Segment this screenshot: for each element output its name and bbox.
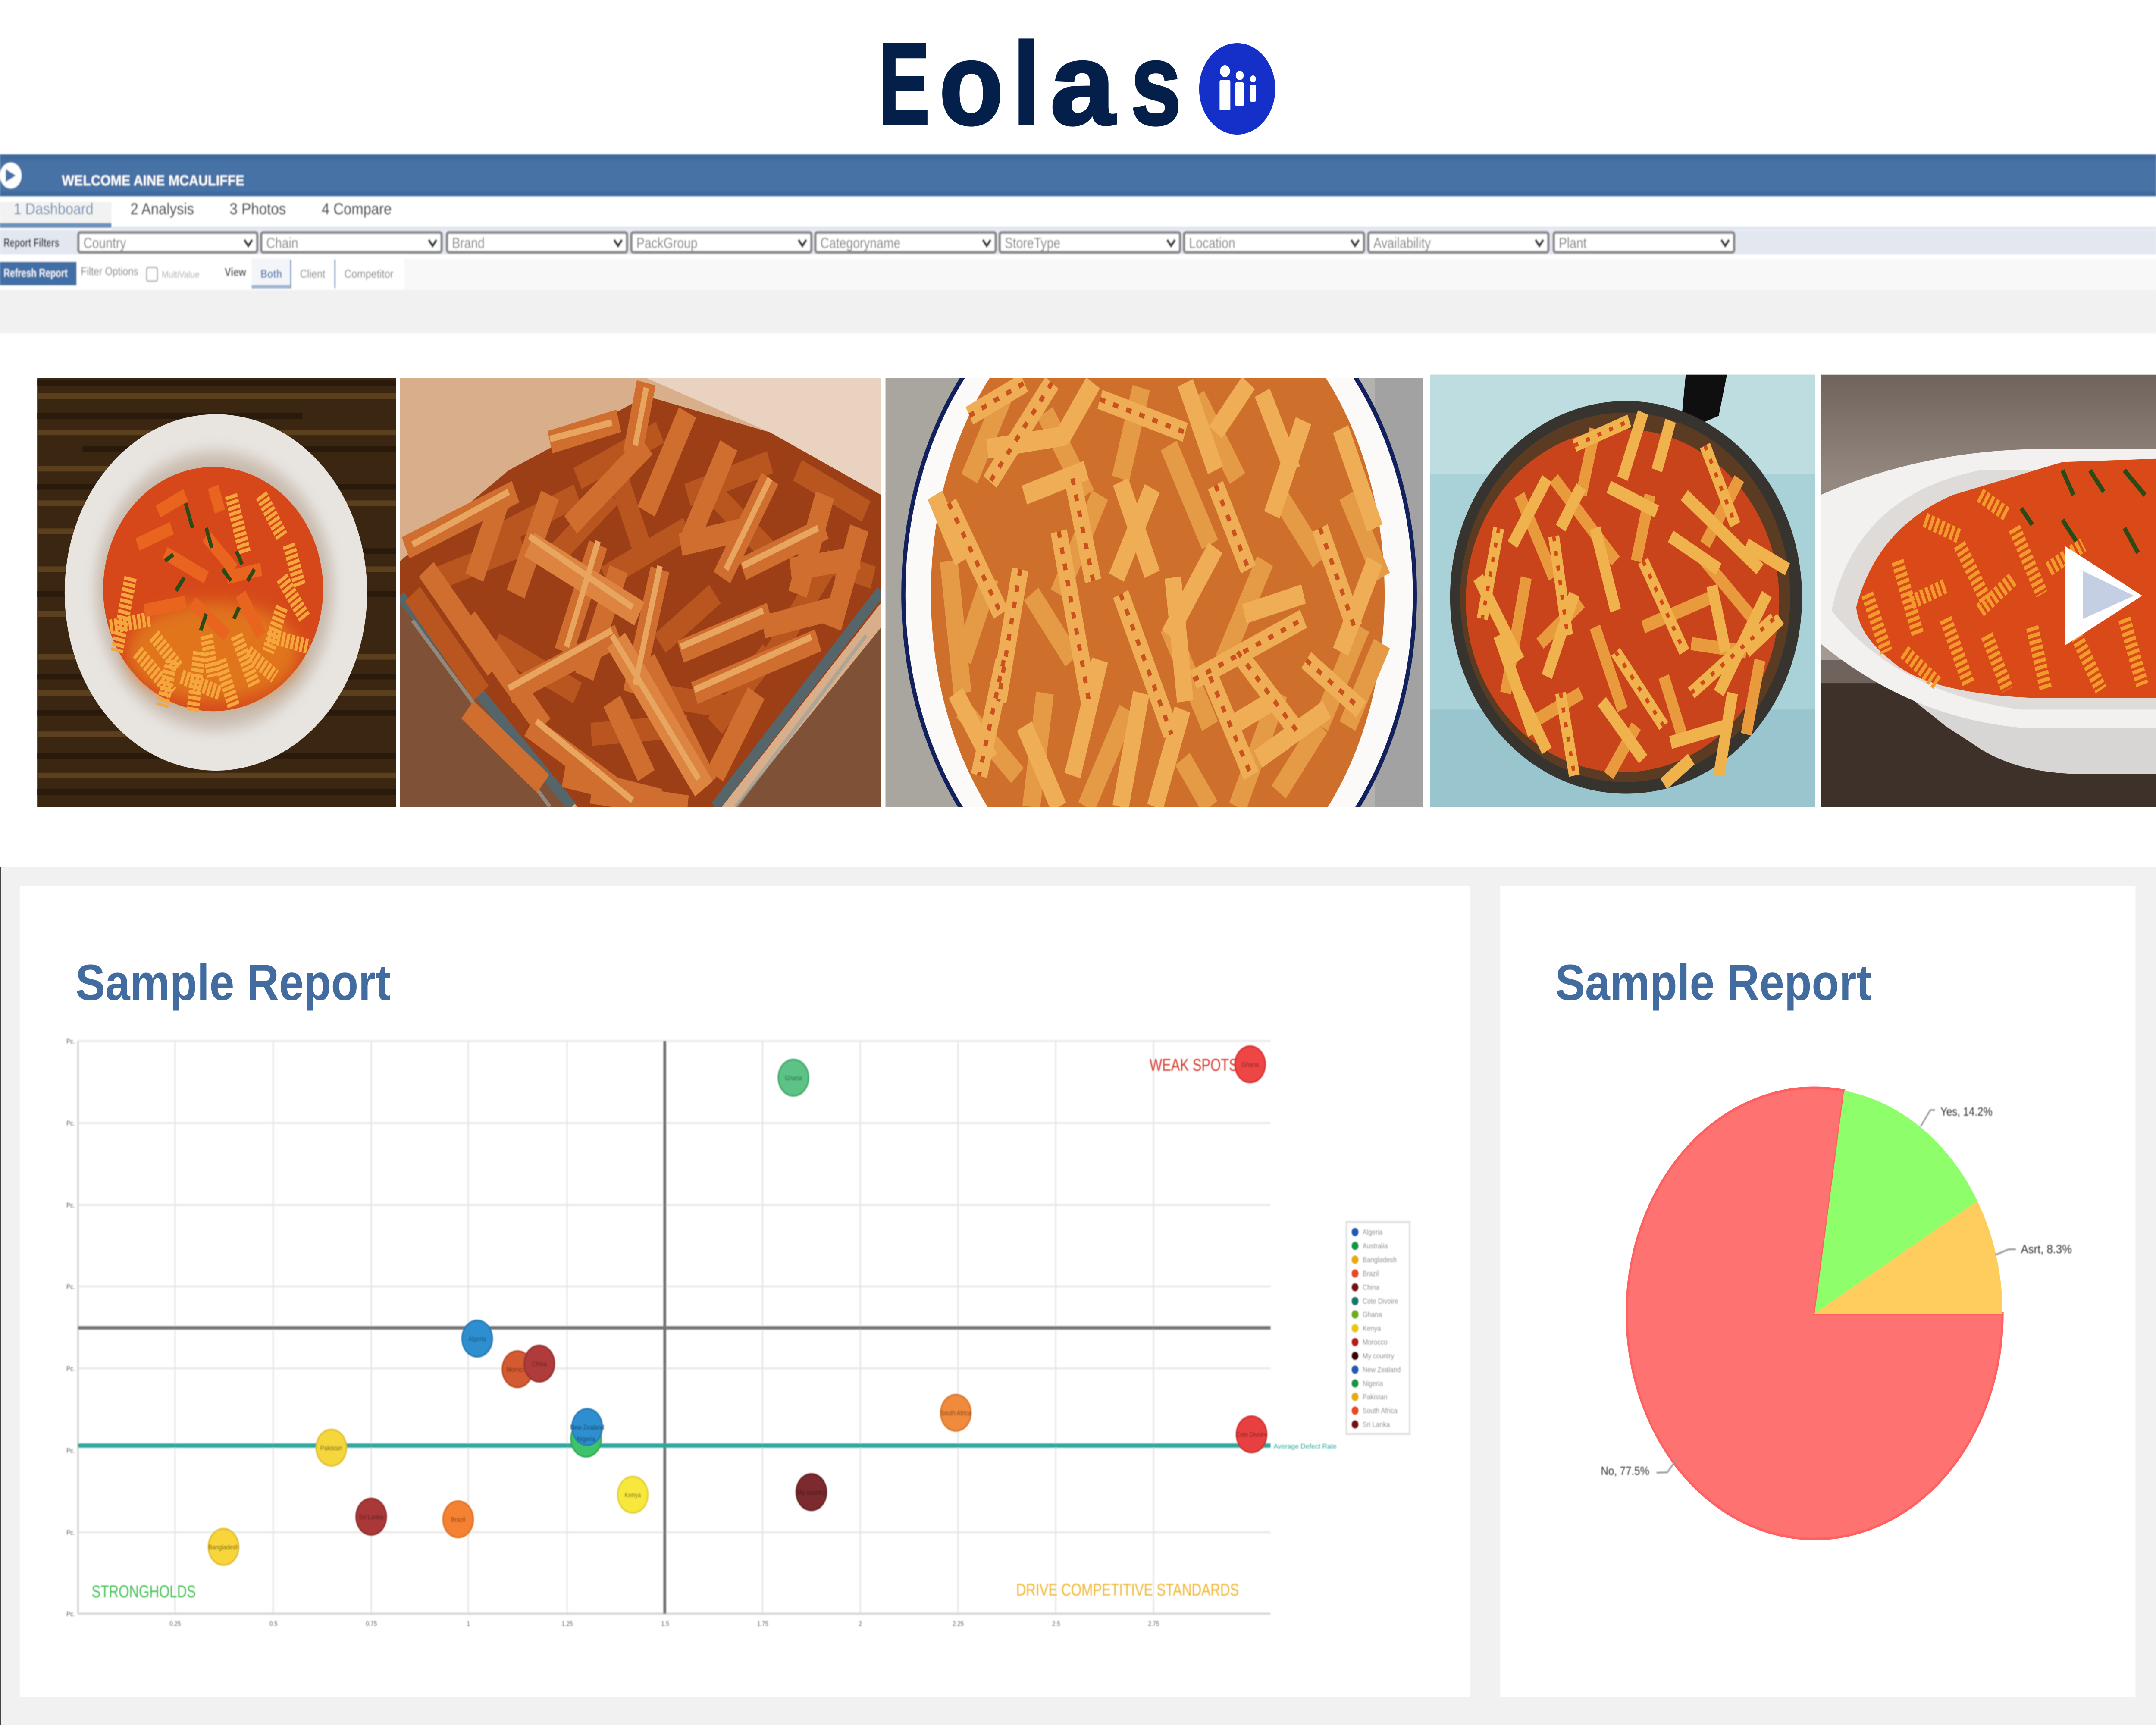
axis labels: 0.5 (270, 1620, 278, 1628)
report filters row: Country (83, 235, 126, 251)
bowl (1904, 693, 2156, 774)
quadrant labels (92, 1055, 1337, 1601)
welcome bar (0, 154, 2156, 196)
refresh and view options row: MultiValue (162, 270, 200, 280)
logo wordmark: s (1131, 19, 1181, 149)
photo 3: penne on a white plate with navy rim (886, 378, 1423, 807)
axis labels: Pc. (66, 1038, 75, 1045)
heading: Sample Report: Sample Report (75, 955, 391, 1011)
data bubbles: China (532, 1361, 547, 1368)
report filters row: Plant (1559, 235, 1587, 251)
axis labels: Pc. (66, 1120, 75, 1127)
report filters row (0, 230, 2156, 254)
quadrant labels: STRONGHOLDS (92, 1582, 196, 1601)
axis labels: Pc. (66, 1447, 75, 1455)
chart legend: Australia (1363, 1242, 1388, 1250)
photo 1: fusilli on a white plate on dark wood (37, 378, 396, 807)
axis labels: 0.75 (366, 1620, 377, 1628)
refresh and view options row: Competitor (344, 268, 393, 281)
report filters row: Brand (452, 235, 485, 251)
refresh and view options row: Filter Options (81, 265, 138, 278)
data bubbles: My country (797, 1489, 826, 1496)
navigation tabs: 3 Photos (229, 200, 286, 218)
refresh and view options row: Refresh Report (3, 267, 68, 280)
photo 2: penne in a glass baking dish (400, 378, 881, 807)
grey dashboard background (0, 867, 2156, 1725)
data bubbles (208, 1046, 1267, 1565)
report filters row: Location (1189, 235, 1235, 251)
chart legend: Kenya (1363, 1324, 1381, 1333)
icon: play button (2065, 546, 2142, 645)
report filters row: Availability (1373, 235, 1431, 251)
axis labels: 1.5 (661, 1620, 669, 1628)
logo wordmark: o (939, 19, 1003, 149)
axis labels: 2.25 (953, 1620, 964, 1628)
report filters row: StoreType (1005, 235, 1060, 251)
chart legend: Bangladesh (1363, 1255, 1397, 1264)
heading: Sample Report: Sample Report (1555, 955, 1871, 1011)
quadrant labels: Average Defect Rate (1273, 1443, 1337, 1450)
axis labels: Pc. (66, 1202, 75, 1209)
slice: Yes 14.2% (1814, 1091, 1977, 1314)
data bubbles: Brazil (451, 1516, 465, 1524)
refresh and view options row (0, 254, 404, 290)
pie chart (1601, 1088, 2072, 1539)
chart legend: Cote Divoire (1363, 1297, 1398, 1305)
axis labels: 2 (859, 1620, 862, 1628)
data bubbles: Ghana (1241, 1061, 1259, 1069)
logo wordmark: l (1013, 19, 1040, 149)
axis labels: 1.25 (562, 1620, 573, 1628)
chart legend: Sri Lanka (1363, 1420, 1390, 1429)
panel: pie sample report (1500, 886, 2135, 1697)
navigation tabs: 1 Dashboard (14, 200, 94, 218)
axis labels: 1.75 (757, 1620, 768, 1628)
slice: Asrt 8.3% (1814, 1201, 2002, 1314)
axis labels: 2.75 (1148, 1620, 1159, 1628)
photo 4: penne in a black skillet on teal background (1430, 375, 1815, 807)
quadrant labels: WEAK SPOTS (1150, 1055, 1238, 1075)
chart legend: Nigeria (1363, 1379, 1383, 1388)
axis labels: 2.5 (1052, 1620, 1060, 1628)
photo 5: fusilli in a white bowl with play button (1821, 375, 2156, 807)
navigation tabs (0, 200, 2156, 229)
report filters row: Categoryname (820, 235, 900, 251)
axis labels: 0.25 (169, 1620, 181, 1628)
pie labels: No, 77.5% (1601, 1465, 1649, 1478)
data bubbles: New Zealand (570, 1424, 604, 1431)
data bubbles: South Africa (940, 1410, 971, 1417)
data bubbles: Nigeria (577, 1436, 595, 1443)
chart legend: Ghana (1363, 1310, 1382, 1319)
axis labels: Pc. (66, 1529, 75, 1537)
navigation tabs: 4 Compare (322, 200, 392, 218)
pie labels (1601, 1105, 2072, 1478)
chart legend: My country (1363, 1352, 1395, 1360)
food in bowl (1856, 459, 2156, 698)
icon: blue circle with people (1199, 43, 1275, 135)
logo wordmark: a (1050, 19, 1116, 149)
report filters row: Report Filters (3, 236, 60, 250)
logo: Eolas (879, 19, 1275, 149)
refresh and view options row: Client (300, 268, 325, 281)
axis labels: Pc. (66, 1611, 75, 1618)
photo strip (37, 374, 2156, 807)
data bubbles: Cote Divoire (1236, 1431, 1267, 1439)
logo wordmark: E (879, 19, 930, 149)
data bubbles: Morocco (506, 1366, 529, 1374)
pie labels: Asrt, 8.3% (2021, 1243, 2072, 1256)
axis labels (66, 1038, 1159, 1628)
scatter chart (66, 1038, 1410, 1628)
chart legend: Brazil (1363, 1269, 1379, 1278)
chart legend: Algeria (1363, 1228, 1383, 1236)
data bubbles: Ghana (785, 1075, 802, 1082)
chart legend (1346, 1222, 1410, 1434)
axis labels: Pc. (66, 1365, 75, 1373)
report filters row: PackGroup (636, 235, 698, 251)
data bubbles: Pakistan (320, 1445, 342, 1452)
data bubbles: Bangladesh (208, 1544, 239, 1551)
data bubbles: Kenya (625, 1492, 641, 1499)
refresh and view options row: View (225, 266, 246, 279)
quadrant labels: DRIVE COMPETITIVE STANDARDS (1016, 1580, 1239, 1600)
chart legend: Morocco (1363, 1338, 1387, 1346)
icon: skillet handle (1682, 374, 1727, 422)
panel: scatter sample report (20, 886, 1470, 1697)
axis labels: Pc. (66, 1283, 75, 1291)
welcome bar: WELCOME AINE MCAULIFFE (62, 172, 244, 189)
refresh and view options row: Both (260, 268, 282, 281)
chart legend: Pakistan (1363, 1393, 1387, 1401)
navigation tabs: 2 Analysis (130, 200, 194, 218)
data bubbles: Algeria (468, 1336, 486, 1343)
axis labels: 1 (467, 1620, 470, 1628)
chart legend: China (1363, 1283, 1380, 1292)
pie labels: Yes, 14.2% (1940, 1105, 1993, 1119)
chart legend: New Zealand (1363, 1365, 1401, 1374)
report filters row: Chain (266, 235, 298, 251)
slice: No 77.5% (1626, 1088, 2002, 1539)
grid and quadrant lines (78, 1041, 1271, 1614)
chart legend: South Africa (1363, 1406, 1398, 1415)
dashboard screenshot header (0, 154, 2156, 333)
data bubbles: Sri Lanka (359, 1514, 384, 1521)
